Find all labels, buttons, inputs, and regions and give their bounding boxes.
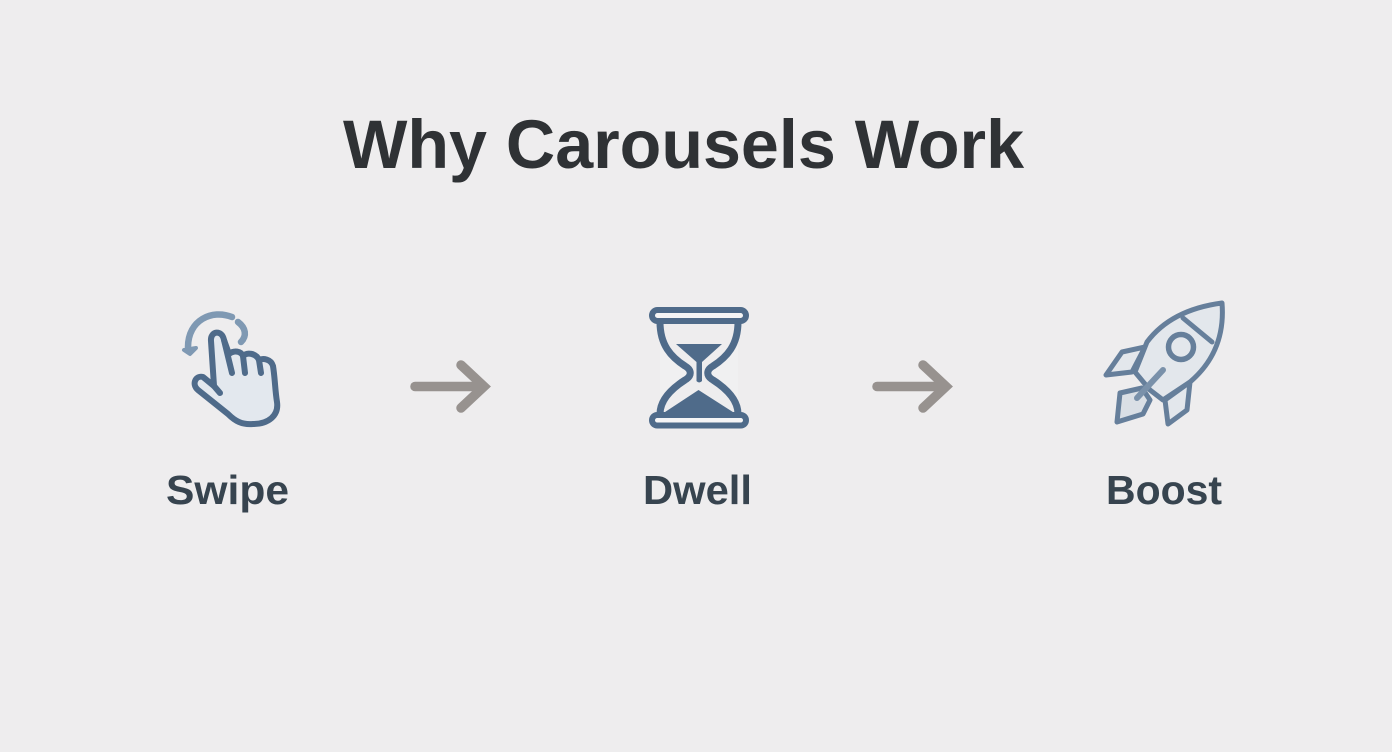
flame	[1117, 388, 1150, 422]
icon: swipe hand	[184, 314, 277, 424]
rocket body	[1135, 303, 1222, 400]
label: Swipe: Swipe	[166, 467, 289, 513]
label: Boost: Boost	[1106, 467, 1222, 513]
icon: rotation arrow	[184, 314, 245, 354]
glass outline	[660, 322, 738, 414]
arrow: swipe to dwell	[415, 365, 484, 408]
bottom cap	[652, 415, 746, 426]
top cap	[652, 310, 746, 321]
sand top	[676, 344, 722, 382]
nose line	[1183, 318, 1212, 342]
finger lines	[214, 340, 261, 393]
label: Dwell: Dwell	[643, 467, 752, 513]
exhaust line	[1137, 370, 1163, 398]
title: Why Carousels Work	[343, 106, 1025, 183]
porthole	[1168, 334, 1194, 360]
arrow: dwell to boost	[877, 365, 946, 408]
right fin	[1165, 382, 1190, 424]
hand outline	[195, 333, 277, 424]
left fin	[1106, 347, 1145, 375]
icon: rocket	[1106, 303, 1222, 424]
sand bottom	[662, 390, 736, 414]
icon: hourglass	[652, 310, 746, 426]
